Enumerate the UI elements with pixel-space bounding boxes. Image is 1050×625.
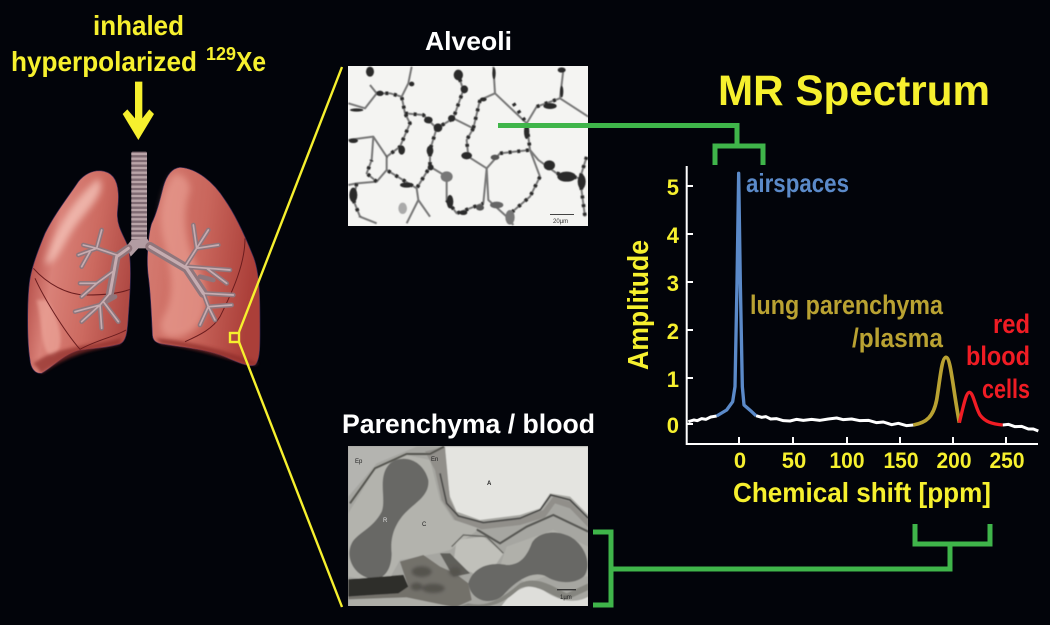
- y axis numbers: 2: [667, 319, 679, 344]
- inhaled label: 129: [206, 44, 236, 64]
- label: red blood cells: cells: [982, 374, 1030, 404]
- MR spectrum chart: [623, 166, 1038, 508]
- micrograph: alveoli: [348, 66, 588, 226]
- green connector: parenchyma to dissolved peaks: [593, 524, 990, 605]
- x axis numbers: 100: [830, 448, 864, 473]
- micrograph annotations: Ep: [355, 459, 363, 465]
- lungs illustration: [28, 152, 260, 373]
- x axis numbers: 50: [782, 448, 806, 473]
- heading: Parenchyma / blood: Parenchyma / blood: [342, 409, 595, 439]
- arrow: inhalation: [123, 82, 154, 140]
- airspaces peak: [717, 173, 756, 416]
- title: MR Spectrum: MR Spectrum: [718, 67, 990, 115]
- y axis numbers: 4: [667, 223, 680, 248]
- inhaled label: hyperpolarized: [11, 46, 197, 77]
- green connector: alveoli to airspaces peak: [498, 126, 763, 165]
- label: red blood cells: red: [993, 309, 1030, 339]
- y axis numbers: 3: [667, 271, 679, 296]
- axis title: Amplitude: Amplitude: [623, 240, 655, 370]
- x axis numbers: 250: [990, 448, 1024, 473]
- red blood cell peak: [959, 392, 1003, 425]
- x axis numbers: 150: [884, 448, 918, 473]
- label: red blood cells: [966, 309, 1030, 404]
- left lung: [28, 171, 130, 373]
- micrograph: parenchyma and blood: [348, 446, 588, 609]
- label: lung parenchyma / plasma: /plasma: [852, 323, 944, 353]
- x axis numbers: 0: [734, 448, 746, 473]
- micrograph annotations: A: [487, 481, 492, 487]
- x axis numbers: [734, 448, 1024, 473]
- y axis numbers: 5: [667, 175, 679, 200]
- micrograph annotations: [355, 457, 576, 601]
- micrograph annotations: 1µm: [560, 595, 572, 601]
- scale bar: 20 µm: 20µm: [553, 219, 568, 225]
- axis title: Chemical shift: Chemical shift [ppm]: [733, 477, 991, 508]
- micrograph annotations: C: [422, 522, 427, 528]
- zoom lines and region marker: [230, 67, 342, 607]
- inhaled label: Xe: [236, 46, 266, 77]
- y axis numbers: [667, 175, 680, 438]
- micrograph annotations: En: [431, 457, 438, 463]
- x axis numbers: 200: [936, 448, 972, 473]
- scale bar: 20 µm: [550, 214, 574, 225]
- parenchyma peak: [913, 357, 959, 425]
- y axis numbers: 1: [667, 367, 679, 392]
- label: red blood cells: blood: [966, 341, 1030, 371]
- axes with ticks: [687, 166, 1038, 444]
- label: lung parenchyma / plasma: lung parenchyma: [750, 290, 944, 320]
- inhaled label: inhaled: [93, 10, 184, 41]
- label: lung parenchyma / plasma: [750, 290, 944, 353]
- inhaled label: [11, 10, 266, 77]
- right lung: [147, 167, 260, 366]
- bronchial tree: [75, 225, 233, 328]
- trachea: [127, 152, 150, 257]
- micrograph annotations: R: [383, 518, 388, 524]
- y axis numbers: 0: [667, 413, 679, 438]
- spectrum baseline: [688, 416, 1038, 431]
- label: airspaces: airspaces: [746, 168, 849, 198]
- heading: Alveoli: Alveoli: [425, 26, 512, 56]
